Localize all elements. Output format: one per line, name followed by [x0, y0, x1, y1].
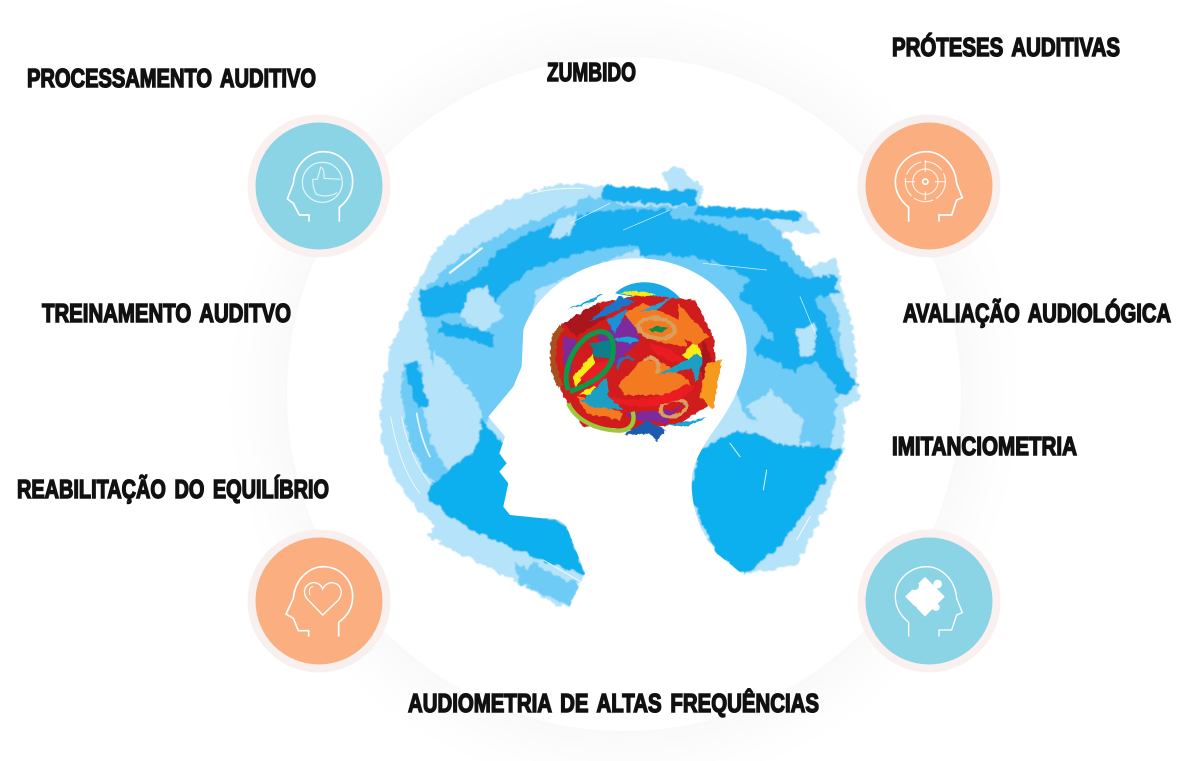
icon: thumbs-up head [248, 114, 390, 258]
label: processamento auditivo: PROCESSAMENTO AUDITIVO [27, 63, 316, 93]
blue brush swirl [380, 167, 860, 607]
strong blue arcs [410, 193, 850, 407]
label: zumbido: ZUMBIDO [547, 57, 636, 87]
neck back dark patch [690, 432, 842, 574]
orange centre [618, 358, 692, 395]
mid blue arcs [412, 363, 825, 593]
blue cap [615, 282, 682, 300]
background white circle with soft shadow [287, 57, 961, 731]
teal arrows [658, 354, 703, 383]
dark red and orange base [552, 295, 717, 430]
tan rings [637, 316, 688, 420]
label: treinamento auditvo: TREINAMENTO AUDITVO [42, 298, 291, 328]
label: reabilitação do equilíbrio: REABILITAÇÃO DO EQUILÍBRIO [17, 474, 329, 504]
light green arc [568, 403, 634, 431]
icon: target head [858, 114, 1000, 258]
label: próteses auditivas: PRÓTESES AUDITIVAS [892, 32, 1120, 62]
light patches [460, 287, 503, 332]
central head illustration [380, 167, 860, 620]
green ring [566, 332, 613, 392]
red arrowhead [580, 358, 616, 387]
purple and yellow patches [563, 337, 577, 373]
label: audiometria de altas frequências: AUDIOMETRIA DE ALTAS FREQUÊNCIAS [408, 688, 819, 718]
thin brush hairlines [391, 188, 817, 583]
chin dark patch [427, 420, 587, 576]
icon: puzzle head [858, 530, 1000, 672]
label: imitanciometria: IMITANCIOMETRIA [892, 431, 1077, 461]
brown left arc [553, 327, 562, 387]
red crescent [605, 383, 694, 406]
colourful scribble brain [552, 282, 722, 442]
icon: heart head [248, 530, 390, 672]
mid blue body [420, 197, 847, 450]
navy strokes [623, 420, 666, 442]
white head silhouette [488, 258, 747, 620]
